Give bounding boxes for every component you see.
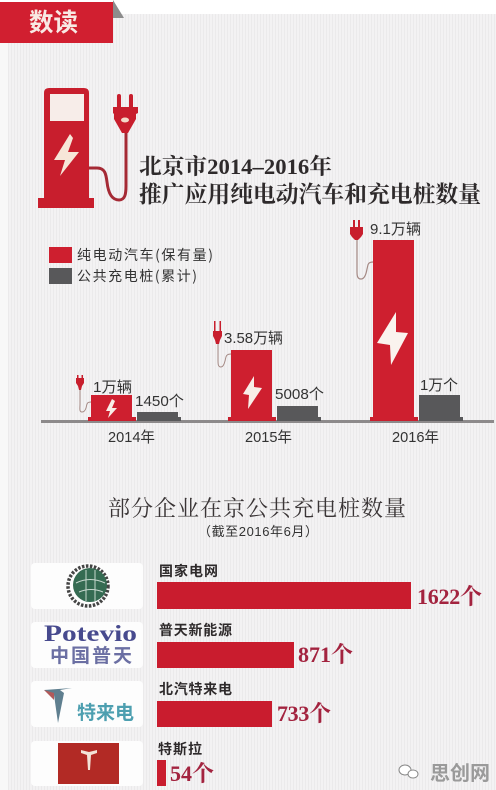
row: 普天新能源: 普天新能源 xyxy=(159,620,232,640)
row: 特斯拉 xyxy=(31,739,214,786)
header tab: 数读: 数读 xyxy=(29,3,78,39)
2014 group: 1万辆 xyxy=(93,379,132,396)
logo: State Grid xyxy=(31,563,143,609)
logo: Potevio xyxy=(31,621,143,668)
logo: Tesla xyxy=(31,741,143,786)
2016 group: 2016年 xyxy=(392,429,439,446)
row: 普天新能源: 871个 xyxy=(298,642,353,667)
2014 group xyxy=(76,375,184,446)
row: 国家电网: 1622个 xyxy=(417,584,482,609)
row: 北汽特来电: 北汽特来电 xyxy=(159,679,232,699)
row: 国家电网 xyxy=(31,561,482,609)
logo: TELD xyxy=(31,681,143,727)
row: 北汽特来电: 733个 xyxy=(277,701,331,726)
section heading: 部分企业在京公共充电桩数量 xyxy=(108,496,406,521)
row: 特斯拉: 特斯拉 xyxy=(158,739,202,759)
logo: TELD: 特来电 xyxy=(77,698,134,725)
2015 group xyxy=(213,321,324,446)
legend xyxy=(49,245,213,286)
2015 group: 2015年 xyxy=(245,429,292,446)
row: 国家电网: 国家电网 xyxy=(159,561,218,581)
2015 group: 3.58万辆 xyxy=(224,330,283,347)
bar chart: vehicles and charging piles 2014-2016 xyxy=(41,220,494,446)
row: 普天新能源 xyxy=(31,620,353,668)
section subheading: （截至2016年6月） xyxy=(198,524,318,539)
row: 特斯拉: 54个 xyxy=(170,761,214,786)
2016 group: 1万个 xyxy=(420,377,458,394)
header tab: 数读 xyxy=(0,0,124,43)
title xyxy=(139,154,481,207)
legend: 公共充电桩(累计) xyxy=(77,266,197,286)
icon: charging station with plug xyxy=(38,88,138,208)
2016 group: 9.1万辆 xyxy=(370,221,421,238)
row: 北汽特来电 xyxy=(31,679,331,727)
title: 推广应用纯电动汽车和充电桩数量 xyxy=(139,181,481,207)
watermark: 思创网 xyxy=(399,757,490,786)
watermark: 思创网: 思创网 xyxy=(430,757,490,786)
2015 group: 5008个 xyxy=(275,386,324,403)
logo: Potevio: 中国普天 xyxy=(50,641,132,668)
title: 北京市2014–2016年 xyxy=(139,154,332,179)
2016 group xyxy=(350,220,463,446)
2014 group: 2014年 xyxy=(108,429,155,446)
legend: 纯电动汽车(保有量) xyxy=(77,245,213,265)
logo: Potevio: Potevio xyxy=(44,621,137,646)
2014 group: 1450个 xyxy=(135,393,184,410)
